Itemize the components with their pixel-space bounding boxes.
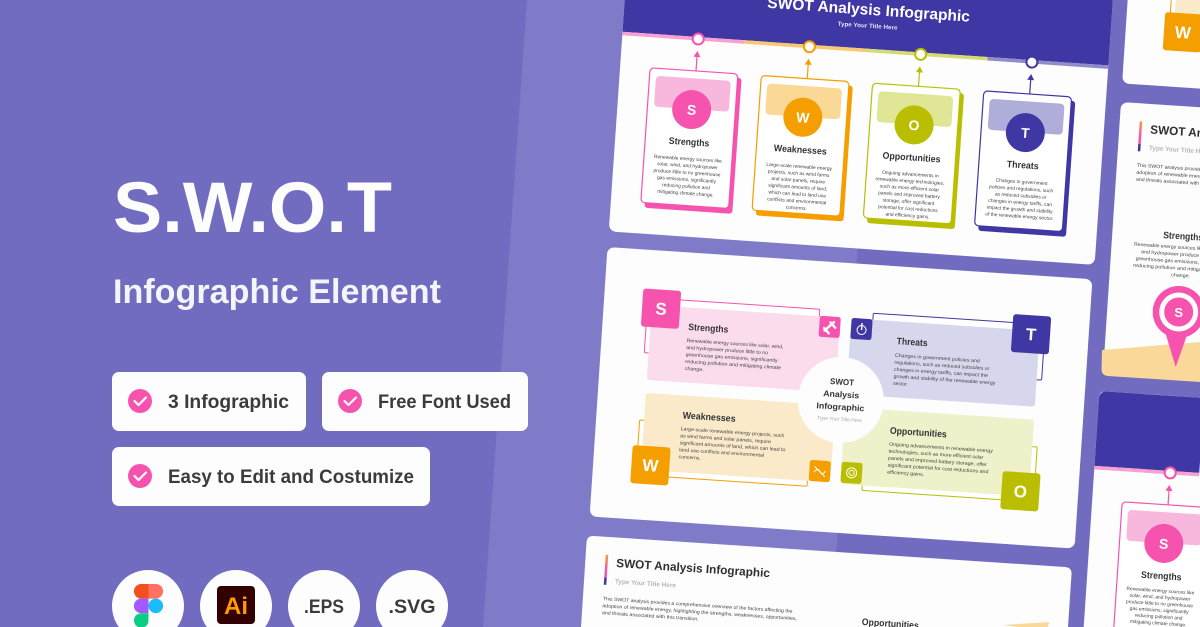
card: Threats: T [1021, 125, 1031, 141]
panel: quadrant slide (top right, cropped) [1122, 0, 1200, 116]
card: Weaknesses: Weaknesses [773, 143, 827, 158]
yellow shape [1003, 622, 1049, 627]
icon: SVG format [376, 570, 448, 627]
card: Threats: as reduced subsidies or [995, 191, 1047, 201]
quadrant: Opportunities: O [1013, 482, 1028, 502]
quadrant: Threats: regulations, such as reduced subsidies or [894, 360, 990, 372]
card: Strengths: gas emissions, significantly [657, 175, 717, 185]
card: Opportunities: renewable energy technologies, [875, 176, 945, 187]
subheading: Infographic Element: Infographic Element [113, 273, 441, 311]
card: Strengths: S [1159, 535, 1169, 552]
card: Strengths [1114, 482, 1200, 627]
card: Opportunities: potential for cost reductions [878, 204, 939, 214]
centre circle: Analysis [823, 388, 860, 401]
card: Strengths: gas emissions, significantly [1129, 606, 1189, 616]
card: Weaknesses [752, 56, 855, 221]
quadrant: Weaknesses: Weaknesses [682, 410, 736, 425]
icon: SVG format: .SVG [388, 597, 436, 618]
quadrant: Weaknesses: significant amounts of land, which can lead to [679, 440, 786, 453]
card: Strengths: solar, wind, and hydropower [1129, 593, 1191, 603]
feature badge: Easy to Edit and Costumize [112, 447, 430, 506]
quadrant: Strengths: greenhouse gas emissions, significantly [686, 352, 778, 364]
card: Strengths [640, 48, 743, 214]
intro text: adoption of renewable energy, highlighting the strengths, weaknesses, opportunities, [602, 603, 797, 622]
card: Opportunities: Ongoing advancements in [882, 170, 939, 180]
quadrant: Weaknesses: as wind farms and solar panels, require [680, 433, 771, 445]
feature badge: 3 Infographic [112, 372, 306, 431]
quadrant: Opportunities: significant potential for cost reductions and [887, 463, 989, 475]
intro text: and threats associated with this transition. [602, 610, 699, 623]
card: Weaknesses: and solar panels, require [771, 176, 826, 186]
accent bar [604, 555, 608, 585]
feature badge: 3 Infographic: 3 Infographic [168, 391, 289, 413]
quadrant: Threats: T [1025, 325, 1037, 345]
card: Strengths: Strengths [1141, 570, 1182, 583]
card: Strengths: S [686, 101, 697, 118]
panel: overview slide content (bottom) [602, 555, 922, 627]
quadrant: Weaknesses: W [642, 456, 660, 476]
timeline marker [1164, 467, 1176, 479]
quadrant: Opportunities: efficiency gains. [887, 470, 924, 478]
subtitle: Type Your Title Here [837, 22, 898, 32]
card: Opportunities: such as more efficient solar [880, 183, 940, 194]
quadrant: Threats: growth and stability of the renewable energy [893, 374, 996, 387]
feature badge: Free Font Used: Free Font Used [378, 391, 511, 413]
quadrant: Threats: sector. [893, 381, 908, 388]
heading: S.W.O.T: S.W.O.T [113, 169, 392, 248]
card: Threats: policies and regulations, such [989, 184, 1054, 194]
card: Threats [974, 71, 1077, 237]
card: Strengths: mitigating climate change. [657, 189, 714, 199]
icon: Adobe Illustrator [200, 570, 272, 627]
card: Threats: changes in energy tariffs, can [988, 198, 1052, 208]
quadrant: Opportunities: technologies, such as more efficient solar [888, 449, 984, 461]
quadrant: Weaknesses [630, 392, 835, 496]
card: Strengths: produce little to no greenhouse [653, 168, 721, 178]
title: SWOT Analysis Infographic [616, 556, 771, 580]
quadrant: Strengths: Strengths [688, 322, 729, 336]
quadrant: Threats [846, 303, 1051, 407]
card: Weaknesses: Large-scale renewable energy [766, 162, 833, 172]
panel: timeline cards slide [609, 0, 1113, 265]
accent bar [1138, 121, 1142, 151]
icon: Adobe Illustrator: Ai [224, 593, 248, 620]
quadrant: Strengths: and hydropower produce little to no [686, 345, 768, 356]
quadrant: Strengths: S [655, 299, 667, 319]
panel: quadrant slide [590, 247, 1092, 549]
card: Opportunities: O [908, 117, 920, 133]
map pin: S [1153, 286, 1200, 367]
centre circle: SWOT [830, 376, 855, 388]
card: Threats: Threats [1006, 159, 1039, 172]
card: Weaknesses: which can lead to land use [768, 190, 826, 200]
quadrant: Opportunities: Opportunities [890, 426, 947, 440]
card: Threats: impact the growth and stability [987, 205, 1053, 215]
panel: overview slide (right, cropped) [1103, 102, 1200, 404]
card: Weaknesses: projects, such as wind farms [768, 169, 830, 179]
feature badge: Free Font Used [322, 372, 528, 431]
intro text: This SWOT analysis provides a comprehensive overview of the factors affecting the [603, 596, 793, 615]
quadrant: Strengths [637, 288, 842, 392]
timeline band [622, 28, 1109, 73]
quadrant: Strengths: change. [685, 366, 704, 373]
panel: overview slide background (bottom) [581, 536, 1072, 627]
card: Strengths: Strengths [668, 136, 710, 150]
quadrant: Strengths: Renewable energy sources like solar, wind, [686, 338, 784, 350]
quadrant: Weaknesses: land use conflicts and environmental [679, 447, 764, 459]
intro text [602, 596, 798, 627]
quadrant: Threats: changes in energy tariffs, can impact the [894, 367, 988, 379]
card: Weaknesses: W [796, 109, 811, 126]
map pin: S: S [1174, 305, 1183, 320]
quadrant: Weaknesses: Large-scale renewable energy projects, such [680, 426, 785, 439]
feature badge: Easy to Edit and Costumize: Easy to Edit and Costumize [168, 466, 414, 488]
card: Strengths: Renewable energy sources like [1126, 586, 1195, 596]
quadrant: Opportunities: Ongoing advancements in renewable energy [889, 442, 994, 455]
quadrant: Opportunities [839, 407, 1044, 512]
card: Threats: of the renewable energy sector. [985, 211, 1053, 222]
card: Strengths: reducing pollution and [662, 182, 710, 192]
card: Threats: Changes in government [995, 178, 1048, 187]
icon: EPS format: .EPS [304, 597, 344, 618]
panel: quadrant slide (top right, cropped): W [1174, 23, 1192, 43]
header band [623, 0, 1113, 65]
quadrant: Strengths: reducing pollution and mitigating climate [685, 359, 782, 371]
header band [1094, 391, 1200, 473]
quadrant: Threats: Threats [896, 336, 928, 349]
quadrant: Weaknesses: concerns. [679, 454, 701, 462]
card: Strengths: Renewable energy sources like [654, 154, 722, 165]
yellow base [1102, 342, 1200, 382]
card: Opportunities [863, 63, 966, 229]
card: Weaknesses: conflicts and environmental [767, 196, 827, 206]
Strengths block [1132, 228, 1200, 282]
icon: EPS format [288, 570, 360, 627]
card: Strengths: solar, wind, and hydropower [657, 161, 718, 171]
centre circle [795, 354, 887, 446]
card: Strengths: produce little to no greenhouse [1126, 599, 1193, 609]
centre circle: Type Your Title Here [817, 415, 862, 424]
quadrant: Opportunities: panels and improved battery storage, offer [888, 456, 987, 468]
panel: timeline slide background (right, cropped) [1084, 391, 1200, 627]
subtitle: Type Your Title Here [615, 578, 676, 590]
card: Opportunities: panels and improved battery [878, 190, 940, 200]
card: Opportunities: and efficiency gains. [885, 211, 930, 220]
card: Weaknesses: significant amounts of land, [768, 183, 827, 193]
intro text [1136, 163, 1200, 196]
icon: Figma [112, 570, 184, 627]
card: Strengths: reducing pollution and [1135, 613, 1183, 622]
card: Opportunities: storage, offer significant [882, 197, 935, 207]
card: Weaknesses: concerns. [785, 205, 807, 212]
card: Opportunities: Opportunities [882, 151, 941, 166]
quadrant: Threats: Changes in government policies and [895, 353, 980, 364]
timeline strip [1094, 466, 1199, 476]
centre circle: Infographic [816, 400, 865, 413]
panel: timeline slide content (right, cropped) [1084, 391, 1200, 627]
Strengths block: change. [1171, 272, 1190, 279]
